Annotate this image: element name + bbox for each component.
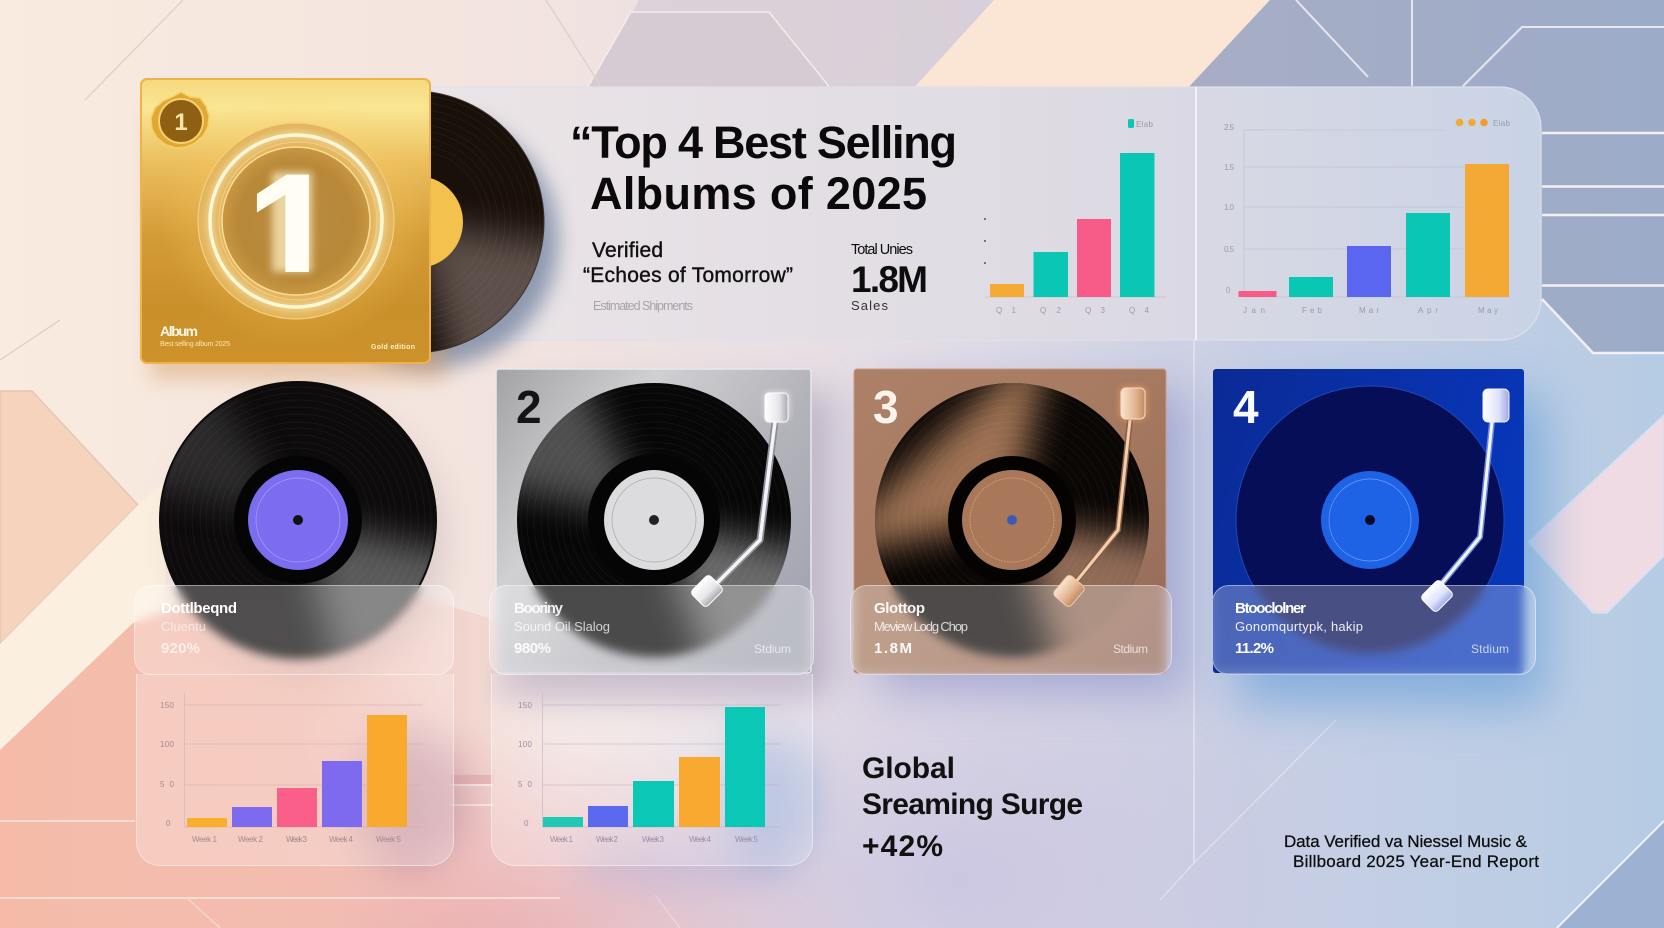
info text rank 4: Stdium [1470, 642, 1508, 656]
chart: top panel right bar chart: 1.0 [1224, 203, 1235, 212]
chart: rank 2 bar chart: 100 [518, 740, 532, 749]
album caption: Album [160, 323, 198, 339]
chart: rank 1 bar chart: 100 [160, 740, 174, 749]
album card: blue sleeve number 4 [1213, 369, 1524, 673]
icon: gold seal badge [151, 92, 209, 148]
chart: rank 1 bar chart: 0 [166, 819, 170, 828]
panel: chart card rank 2 [491, 674, 813, 866]
chart: top panel left bar chart: Q4 [1129, 306, 1150, 315]
album card: silver sleeve number 2 [494, 368, 812, 674]
chart: top panel right bar chart: 0 [1226, 286, 1231, 295]
callout: global streaming surge: +42% [862, 830, 943, 863]
background shapes: bottom right [1160, 340, 1664, 928]
chart: rank 2 bar chart: Week 4 [688, 835, 711, 844]
chart: rank 2 bar chart: 150 [518, 701, 532, 710]
chart: rank 1 bar chart: Week 1 [192, 835, 217, 844]
chart: rank 2 bar chart: Week 5 [734, 835, 758, 844]
rank number 4: 4 [1233, 381, 1259, 433]
panel: top glass statistics panel [425, 87, 1541, 340]
album card: gold sleeve number 1 [141, 79, 431, 363]
chart: top panel right bar chart: Apr [1418, 306, 1438, 315]
icon: vinyl record rank 2 [517, 383, 791, 664]
info text rank 2: Booriny [514, 600, 563, 616]
icon: tonearm rank 2 [690, 391, 790, 608]
info text rank 2: 980% [514, 640, 550, 656]
chart: rank 2 bar chart: Week 1 [550, 835, 573, 844]
chart: rank 2 bar chart: 0 [524, 819, 528, 828]
total units stat [851, 242, 928, 313]
chart: top panel right bar chart: Feb [1302, 306, 1323, 315]
title [570, 117, 957, 219]
icon: vinyl record rank 3 [875, 383, 1149, 664]
verified album text [583, 239, 793, 287]
title: “Top 4 Best Selling [570, 117, 957, 168]
chart: rank 2 bar chart [518, 693, 780, 844]
chart: top panel right bar chart: Elab [1493, 119, 1511, 128]
album caption [160, 323, 415, 351]
source note [1284, 832, 1539, 871]
total units stat: Total Unies [851, 242, 913, 258]
chart: top panel right bar chart: 2.5 [1224, 123, 1235, 132]
chart: top panel right bar chart: 0.5 [1224, 245, 1235, 254]
info text rank 4: Gonomqurtypk, hakip [1234, 618, 1362, 634]
chart: top panel right bar chart: 1.5 [1224, 163, 1235, 172]
info text rank 3: Meview Lodg Chop [874, 618, 968, 634]
callout: global streaming surge: Global [862, 752, 955, 785]
chart: rank 1 bar chart: 50 [160, 780, 174, 789]
album card: bronze sleeve number 3 [850, 368, 1171, 675]
info text rank 2: Stdium [754, 642, 790, 656]
chart: top panel right bar chart [1224, 119, 1511, 315]
rank number 2: 2 [516, 381, 542, 433]
callout: global streaming surge: Sreaming Surge [862, 788, 1083, 821]
info card rank 1 [134, 585, 454, 675]
verified album text: “Echoes of Tomorrow” [583, 264, 793, 287]
info text rank 4 [1234, 600, 1508, 656]
icon: tonearm rank 4 [1420, 389, 1509, 613]
info text rank 2 [514, 600, 790, 656]
icon: vinyl record rank 4 [1236, 386, 1504, 654]
soft shadows for cards and panels [150, 110, 1545, 890]
chart: rank 2 bar chart: 50 [518, 780, 532, 789]
info text rank 2: Sound Oil Slalog [514, 618, 610, 634]
background geometric shapes: top [0, 0, 1664, 360]
info card rank 4 [1212, 585, 1536, 675]
rank number 3: 3 [873, 381, 899, 433]
icon: tonearm rank 3 [1052, 386, 1147, 608]
info text rank 1: Cluentu [160, 618, 206, 634]
icon: glowing ring with rank 1: 1 [245, 138, 341, 330]
chart: top panel right bar chart: Jan [1243, 306, 1265, 315]
info text rank 3: Stdium [1112, 642, 1148, 656]
source note: Billboard 2025 Year-End Report [1293, 852, 1539, 871]
info text rank 1: 920% [160, 640, 200, 656]
chart: top panel left bar chart: Q3 [1085, 306, 1106, 315]
chart: top panel left bar chart: Q2 [1040, 306, 1062, 315]
album caption: Gold edition [371, 344, 415, 351]
chart: rank 2 bar chart: Week 3 [642, 835, 664, 844]
chart: rank 1 bar chart: 150 [160, 701, 174, 710]
chart: rank 1 bar chart: Week 5 [376, 835, 401, 844]
verified album text: Verified [592, 239, 663, 262]
chart: rank 2 bar chart: Week 2 [596, 835, 618, 844]
chart: rank 1 bar chart: Week 4 [328, 835, 353, 844]
chart: top panel left bar chart: Elab [1136, 120, 1154, 129]
info text rank 1 [160, 600, 236, 656]
info card rank 3 [850, 585, 1172, 675]
total units stat: Sales [851, 298, 888, 313]
info text rank 3: 1.8M [874, 640, 912, 656]
icon: vinyl record rank 1 [159, 381, 437, 666]
chart: rank 1 bar chart [160, 693, 422, 844]
info text rank 4: 11.2% [1234, 640, 1274, 656]
icon: vinyl record behind gold sleeve [431, 92, 544, 352]
panel: chart card rank 1 [136, 674, 454, 866]
chart: top panel right bar chart: May [1478, 306, 1498, 315]
chart: top panel right bar chart: Mar [1359, 306, 1379, 315]
icon: gold seal badge: 1 [174, 109, 188, 136]
chart: rank 1 bar chart: Week 3 [286, 835, 307, 844]
background lines: right [1542, 133, 1664, 353]
background shapes: lower left [0, 391, 680, 928]
info text rank 3: Glottop [874, 600, 924, 616]
total units stat: 1.8M [851, 259, 928, 300]
chart: rank 1 bar chart: Week 2 [238, 835, 263, 844]
album caption: Best selling album 2025 [160, 341, 230, 348]
callout: global streaming surge [862, 752, 1083, 863]
title: Albums of 2025 [590, 168, 927, 219]
info text rank 3 [874, 600, 1148, 656]
background shape: pink diamond [1528, 415, 1664, 613]
chart: top panel left bar chart: Q1 [996, 306, 1017, 315]
chart: top panel left bar chart [984, 119, 1166, 315]
info text rank 1: Dottlbeqnd [160, 600, 236, 616]
source note: Data Verified va Niessel Music & [1284, 832, 1528, 851]
verification note: Estimated Shipments [593, 299, 693, 313]
info card rank 2 [489, 585, 814, 675]
info text rank 4: Btooclolner [1234, 600, 1306, 616]
icon: glowing ring with rank 1 [198, 123, 394, 330]
